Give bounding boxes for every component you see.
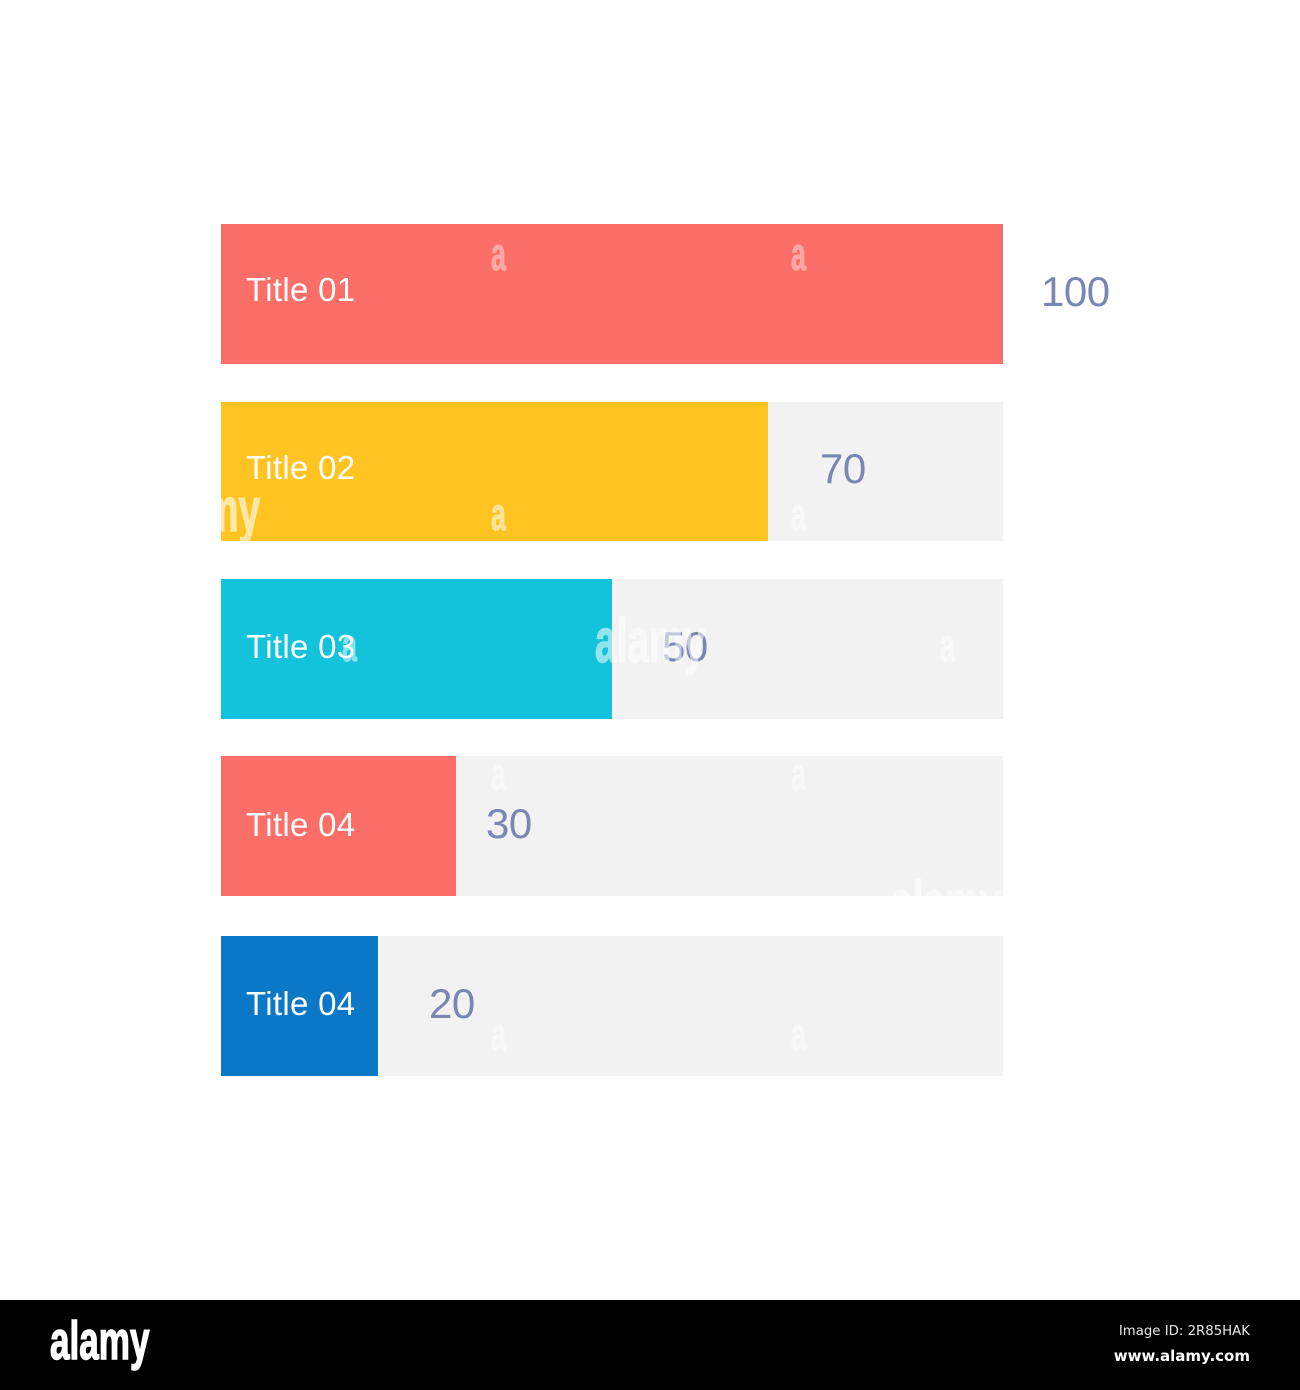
- watermark clipped at row 4 bottom: [221, 756, 1003, 896]
- label: Title 04: Title 04: [246, 806, 355, 843]
- watermark letter, row 3 over label: a: [342, 619, 357, 671]
- footer band: [0, 1300, 1300, 1390]
- watermark letter, row 1 right: a: [791, 228, 806, 280]
- watermark letter, row 2 right: a: [791, 488, 806, 540]
- bar fill: Title 01: [221, 224, 1003, 364]
- bar row: Title 01: [221, 224, 1003, 364]
- watermark letter, row 5 left: a: [491, 1008, 506, 1060]
- watermark letter, row 4 left: a: [491, 748, 506, 800]
- bar fill: Title 04: [221, 756, 456, 896]
- watermark letter, row 1 left: a: [491, 228, 506, 280]
- bar fill: Title 03: [221, 579, 612, 719]
- website: www.alamy.com: [1114, 1347, 1250, 1365]
- label: Title 04 second: Title 04: [246, 985, 355, 1022]
- bar chart: [221, 224, 1111, 1076]
- label: Title 01: Title 01: [246, 271, 355, 308]
- bar row: Title 02: [221, 402, 1003, 541]
- watermark letter, row 3 right: a: [940, 619, 955, 671]
- value: 20: 20: [429, 980, 475, 1027]
- value: 50: 50: [662, 623, 708, 670]
- value: 30: 30: [486, 800, 532, 847]
- watermark letter, row 4 right: a: [791, 748, 806, 800]
- watermark word, row 3 centre: alamy: [595, 607, 705, 676]
- bar row: Title 04: [221, 756, 1003, 896]
- label: Title 02: Title 02: [246, 449, 355, 486]
- watermark letter, row 5 right: a: [791, 1008, 806, 1060]
- bar row: Title 04 second: [221, 936, 1003, 1076]
- bar row: Title 03: [221, 579, 1003, 719]
- image id: Image ID: 2R85HAK: [1119, 1324, 1250, 1339]
- value: 70: 70: [820, 445, 866, 492]
- label: Title 03: Title 03: [246, 628, 355, 665]
- watermark letter, row 2 left: a: [491, 488, 506, 540]
- value: 100: 100: [1041, 268, 1110, 315]
- bar fill: Title 04 second: [221, 936, 378, 1076]
- footer logo: alamy: [50, 1311, 150, 1371]
- bar fill: Title 02: [221, 402, 768, 541]
